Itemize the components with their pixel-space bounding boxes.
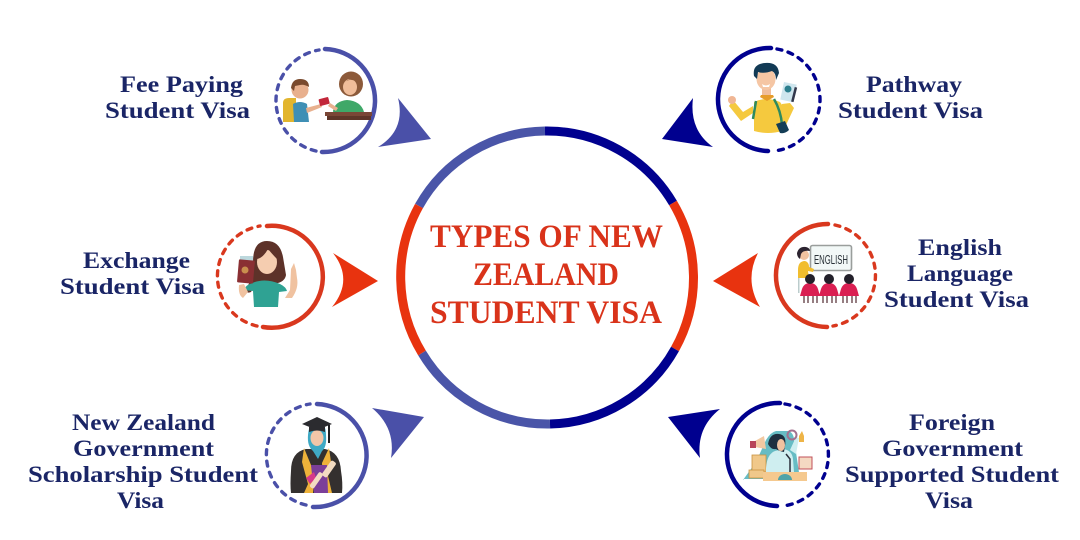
label: Pathway [866, 72, 962, 98]
panel: foreign government supported student visa [668, 403, 1059, 514]
ring segments [401, 131, 693, 424]
label: Student Visa [838, 98, 983, 124]
icon: girl with passport [237, 241, 297, 307]
label: Government [882, 436, 1023, 462]
label: Supported Student [845, 462, 1059, 488]
label: Student Visa [105, 98, 250, 124]
icon: english classroom: ENGLISH [814, 252, 848, 267]
ring [776, 224, 875, 327]
ring [276, 49, 375, 152]
label [838, 72, 983, 124]
panel: english language student visa [713, 224, 1029, 327]
label [105, 72, 250, 124]
arrow [332, 253, 378, 307]
central ring with title [401, 131, 693, 424]
label: New Zealand [72, 410, 215, 436]
panel: pathway student visa [662, 48, 983, 151]
label: Student Visa [60, 274, 205, 300]
ring [727, 403, 828, 506]
arrow [662, 98, 713, 147]
panel: fee paying student visa [105, 49, 431, 152]
label [884, 235, 1029, 313]
ring [266, 404, 367, 507]
arrow [378, 98, 431, 147]
label: Exchange [83, 248, 190, 274]
icon: student paying teacher [283, 72, 372, 122]
panel: exchange student visa [60, 226, 378, 328]
label: Visa [925, 488, 973, 514]
label: Government [73, 436, 214, 462]
icon: graduate [290, 417, 342, 493]
label [845, 410, 1059, 514]
label: Scholarship Student [28, 462, 258, 488]
icon: english classroom [797, 246, 859, 303]
label: Language [907, 261, 1013, 287]
arrow [668, 409, 720, 458]
arrow [713, 253, 760, 307]
icon: student with passport [728, 63, 797, 133]
label [60, 248, 205, 300]
arrow [372, 408, 424, 458]
title: STUDENT VISA [430, 295, 663, 331]
ring [217, 226, 323, 328]
label: English [918, 235, 1002, 261]
label [28, 410, 258, 514]
panel: new zealand government scholarship student visa [28, 404, 424, 514]
label: Student Visa [884, 287, 1029, 313]
label: Foreign [909, 410, 995, 436]
label: Visa [117, 488, 164, 514]
ring [718, 48, 820, 151]
title [430, 219, 663, 331]
label: Fee Paying [120, 72, 243, 98]
title: TYPES OF NEW [430, 219, 663, 255]
title: ZEALAND [473, 257, 619, 293]
icon: government speaker [743, 430, 812, 481]
